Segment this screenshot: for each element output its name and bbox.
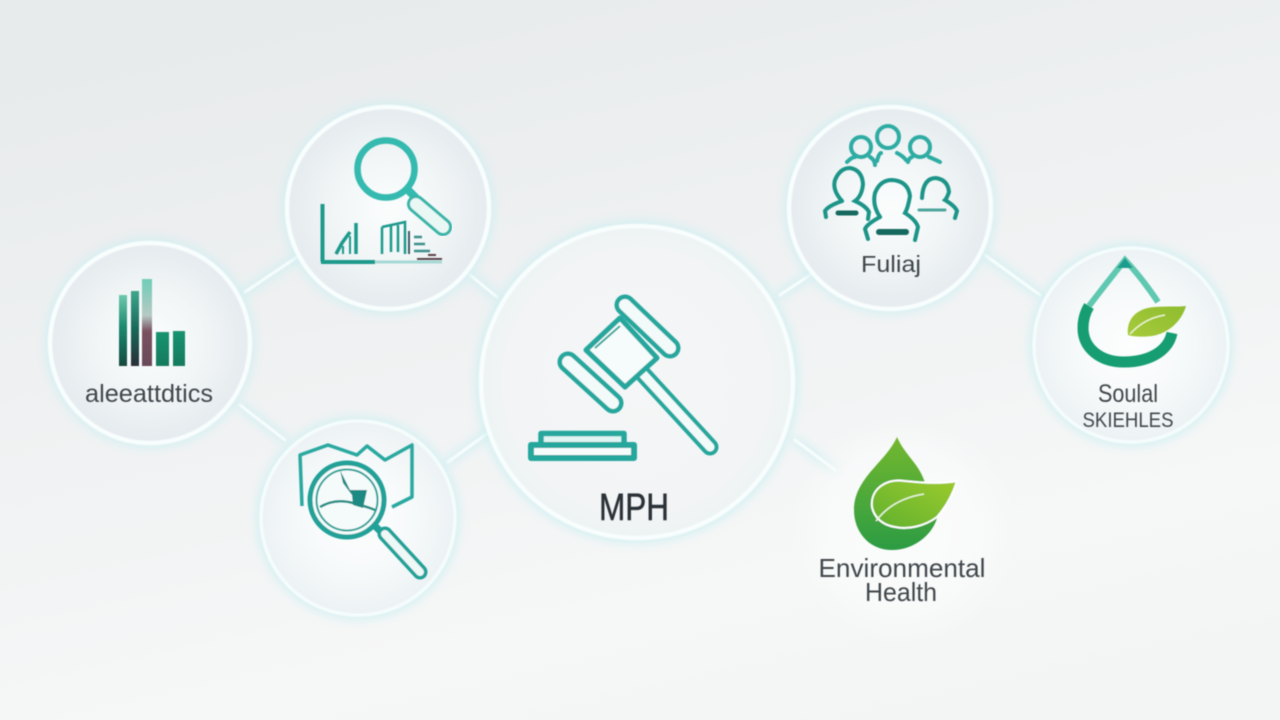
panel: policy people xyxy=(789,107,991,309)
label: statistics: aleeattdtics xyxy=(85,380,213,408)
icon: group of people xyxy=(825,126,957,240)
label: Social Sciences: Soulal xyxy=(1098,380,1158,408)
map ring xyxy=(261,421,455,615)
panel: social sciences xyxy=(1034,248,1228,442)
icon: bar chart xyxy=(119,279,185,366)
panel: research xyxy=(287,107,489,309)
label: Fuliaj: Fuliaj xyxy=(861,251,921,277)
icon: drop outline with leaf xyxy=(1083,258,1186,362)
social sciences ring xyxy=(1034,248,1228,442)
panel: environmental health xyxy=(788,415,1018,645)
icon: green drop with leaf xyxy=(854,437,957,550)
panel: MPH centre xyxy=(481,226,793,538)
icon: folded map xyxy=(300,445,412,507)
label: Social Sciences xyxy=(1082,380,1174,432)
connector lines xyxy=(240,255,1040,470)
label: MPH: MPH xyxy=(599,487,669,529)
label: Social Sciences: SKIEHLES xyxy=(1082,409,1174,432)
panel: statistics xyxy=(50,243,250,443)
icon: gavel xyxy=(531,305,710,458)
label: Environmental Health: Environmental xyxy=(818,553,986,583)
people ring xyxy=(789,107,991,309)
label: Environmental Health: Health xyxy=(865,577,937,607)
MPH ring xyxy=(481,226,793,538)
icon: magnifying glass xyxy=(358,140,443,227)
research ring xyxy=(287,107,489,309)
icon: small chart xyxy=(321,204,442,262)
statistics ring xyxy=(50,243,250,443)
icon: map magnifier xyxy=(310,463,420,572)
label: Environmental Health xyxy=(818,553,986,607)
panel: policy map xyxy=(261,421,455,615)
environmental health disc xyxy=(788,415,1018,645)
